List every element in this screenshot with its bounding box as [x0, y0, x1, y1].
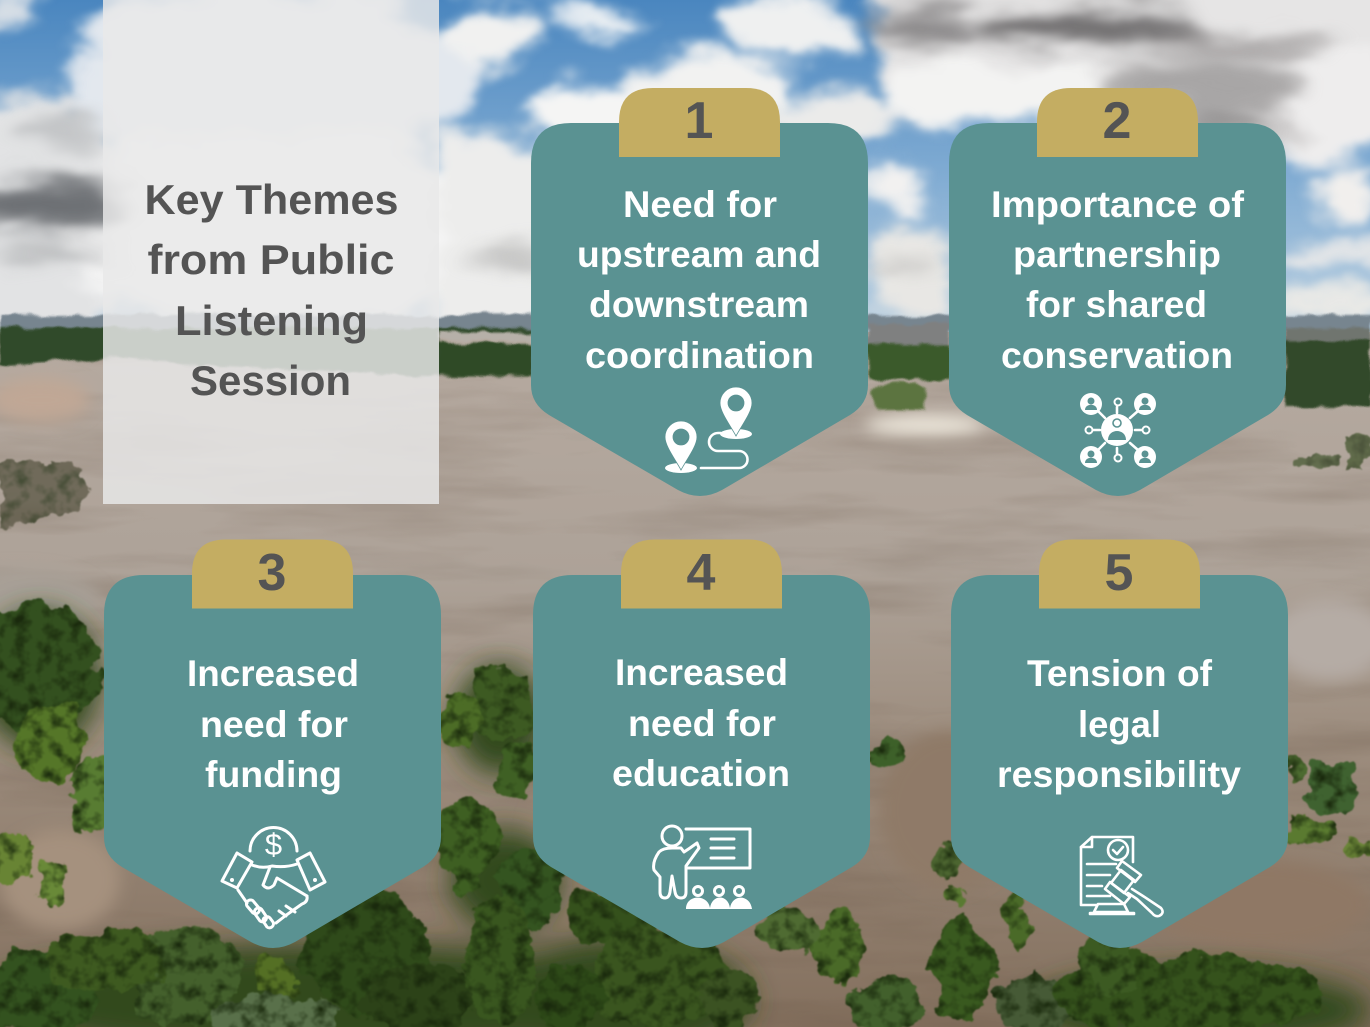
- behind title panel: [70, 0, 470, 180]
- number tab: 1: [685, 92, 713, 150]
- text: [187, 653, 359, 795]
- panel 1: coordination: [531, 88, 868, 496]
- number tab: 3: [258, 544, 286, 602]
- icon: teacher and class: [654, 826, 752, 909]
- text: [991, 184, 1245, 376]
- sky: [0, 0, 1370, 335]
- number tab: [1037, 88, 1198, 157]
- text: funding: [205, 754, 342, 795]
- right cloud mass: [880, 0, 1370, 125]
- number tab: 5: [1105, 544, 1133, 602]
- text: upstream and: [577, 234, 821, 275]
- clouds: [0, 0, 1370, 340]
- translucent panel: [103, 0, 439, 504]
- icon: document and gavel: [1081, 837, 1163, 916]
- text: for shared: [1026, 284, 1207, 325]
- panel 3: funding: [104, 540, 441, 948]
- panel 2: partnership: [949, 88, 1286, 496]
- number tab: [1039, 540, 1200, 608]
- left edge: [0, 0, 45, 32]
- text: need for: [200, 704, 348, 745]
- text: [612, 652, 790, 794]
- number tab: [619, 88, 780, 157]
- icon: map route pins: [665, 387, 752, 473]
- text: Increased: [187, 653, 359, 694]
- title: Key Themes: [144, 176, 398, 223]
- text: [577, 184, 821, 376]
- water light and shade: [0, 378, 1370, 950]
- flooded trees: [0, 600, 1370, 1027]
- text: Need for: [623, 184, 777, 225]
- shield: [104, 575, 441, 948]
- title: [144, 176, 398, 404]
- number tab: 2: [1103, 92, 1131, 150]
- text: [997, 653, 1241, 795]
- text: responsibility: [997, 754, 1241, 795]
- shield: [951, 575, 1288, 948]
- title panel: [103, 0, 439, 504]
- drowned shoreline trees: [0, 440, 1370, 525]
- title: from Public: [148, 236, 394, 283]
- text: need for: [628, 703, 776, 744]
- text: coordination: [585, 335, 814, 376]
- icon: funding handshake: $: [265, 827, 282, 862]
- number tab: 4: [687, 544, 716, 602]
- center clouds: [445, 5, 535, 65]
- number tab: [621, 540, 782, 608]
- panel 5: legal responsibility: [951, 540, 1288, 948]
- text: legal: [1078, 704, 1161, 745]
- text: conservation: [1001, 335, 1233, 376]
- water: [0, 332, 1370, 1027]
- text: Importance of: [991, 184, 1245, 225]
- icon: people network: [1080, 393, 1156, 468]
- shield: [949, 123, 1286, 496]
- horizon and far tree line: [0, 315, 1370, 410]
- icon: funding handshake: [222, 827, 325, 928]
- text: downstream: [589, 284, 809, 325]
- text: Increased: [615, 652, 788, 693]
- dark cloud bands: [0, 5, 1330, 272]
- shield: [533, 575, 870, 948]
- panel 4: education: [533, 540, 870, 948]
- title: Session: [190, 357, 351, 404]
- number tab: [192, 540, 353, 608]
- dark soft vegetation base: [0, 610, 1370, 1027]
- water ripples: [0, 332, 1370, 1027]
- text: education: [612, 753, 790, 794]
- text: Tension of: [1027, 653, 1213, 694]
- text: partnership: [1013, 234, 1221, 275]
- shield: [531, 123, 868, 496]
- title: Listening: [175, 297, 368, 344]
